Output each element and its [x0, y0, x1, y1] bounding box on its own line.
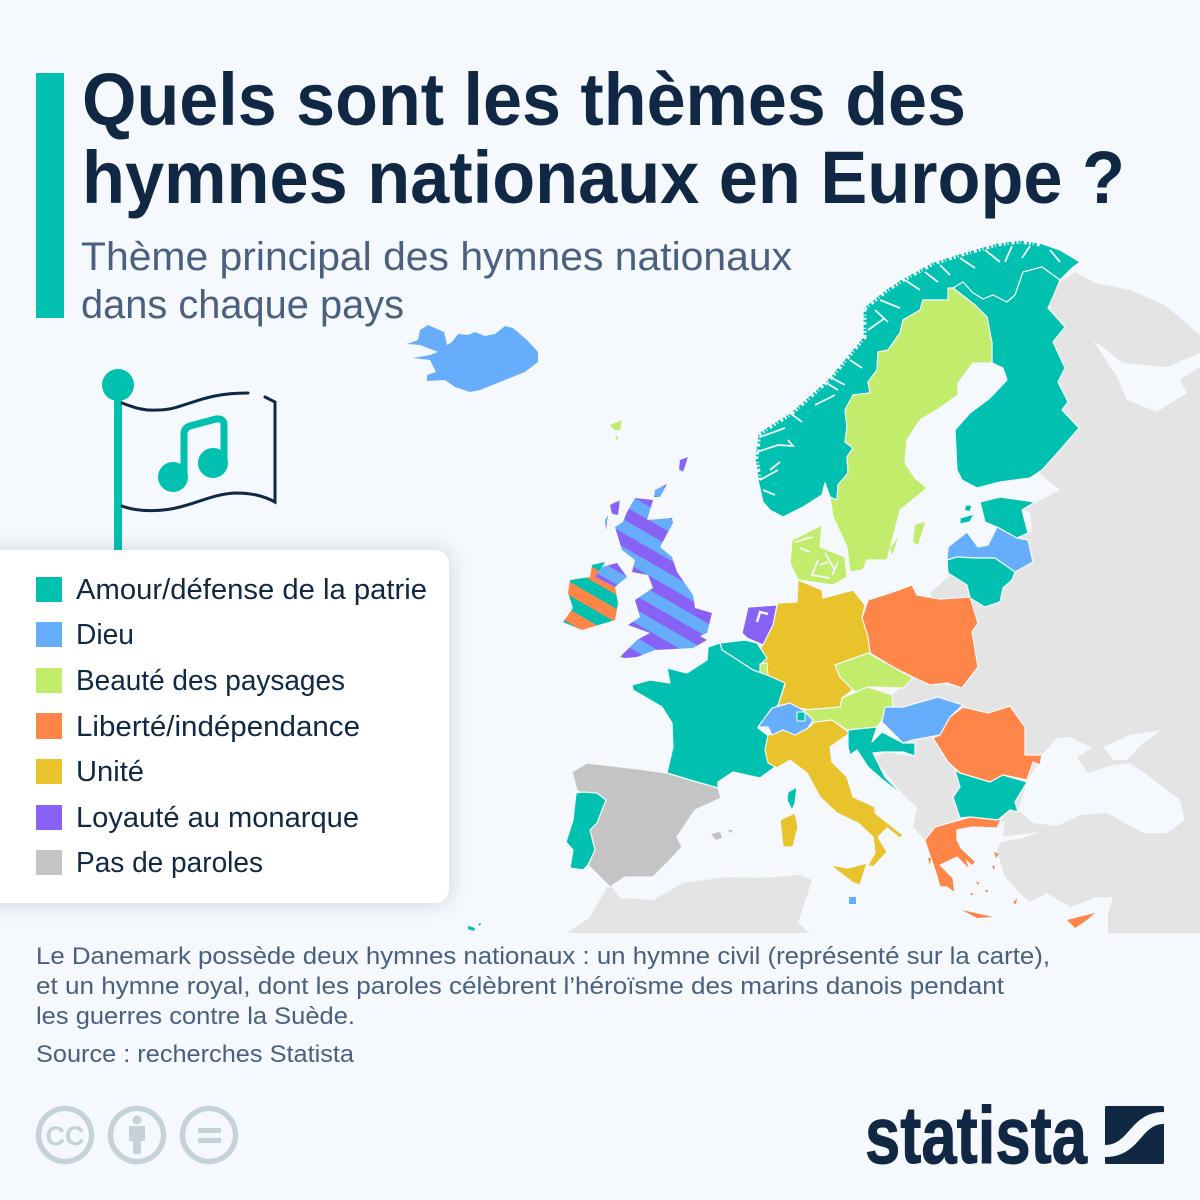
Switzerland [758, 703, 813, 735]
map of Europe [407, 240, 1200, 933]
footnote [36, 943, 1050, 1030]
Malta [849, 897, 856, 904]
Liechtenstein [797, 712, 805, 721]
legend item: Pas de paroles: Pas de paroles [76, 847, 263, 879]
Slovenia and Croatia [848, 727, 915, 797]
Corsica [787, 787, 797, 810]
Balearic islands [711, 830, 733, 840]
subtitle: Thème principal des hymnes nationaux [81, 235, 792, 279]
Austria [803, 687, 893, 730]
legend item: Dieu [36, 619, 134, 651]
Danish straits [795, 537, 838, 578]
legend item: Liberté/indépendance: Liberté/indépendance [76, 711, 360, 743]
neighbouring countries in grey [567, 272, 1200, 933]
Hungary [882, 697, 963, 743]
Norway [755, 240, 1080, 517]
panel: legend [0, 550, 449, 903]
Faroe Islands [610, 420, 622, 441]
Bulgaria [953, 770, 1027, 820]
legend item: Unité: Unité [76, 756, 144, 788]
Germany [758, 580, 870, 710]
Norway coast and fjords [755, 240, 1060, 495]
Czech Republic [835, 653, 913, 692]
footnote: les guerres contre la Suède. [36, 1003, 355, 1030]
subtitle: dans chaque pays [81, 283, 404, 327]
legend item: Dieu: Dieu [76, 619, 134, 651]
Denmark [790, 525, 847, 585]
Latvia [947, 527, 1033, 572]
Swedish island [890, 522, 925, 555]
legend item: Amour/défense de la patrie: Amour/défense de la patrie [76, 574, 427, 606]
seas cut into the grey land [1000, 474, 1185, 842]
Sicily [830, 863, 867, 885]
statista logo: statista [865, 1091, 1088, 1181]
title: Quels sont les thèmes des [82, 58, 966, 141]
title: hymnes nationaux en Europe ? [82, 136, 1125, 219]
footnote: Le Danemark possède deux hymnes nationaux : un hymne civil (représenté sur la carte), [36, 943, 1050, 970]
Lithuania [947, 557, 1015, 607]
Romania [933, 706, 1042, 782]
Netherlands [742, 605, 777, 645]
Luxembourg [760, 663, 768, 676]
title accent bar [36, 73, 64, 318]
Sardinia [780, 813, 798, 847]
Portugal [566, 792, 606, 870]
Italy [765, 720, 903, 867]
Finland [953, 267, 1079, 488]
footnote: et un hymne royal, dont les paroles célèbrent l’héroïsme des marins danois pendant [36, 973, 1004, 1000]
Ireland, striped [563, 562, 618, 630]
Sweden [830, 288, 992, 572]
United Kingdom, striped [595, 457, 712, 658]
legend item: Beauté des paysages: Beauté des paysages [76, 665, 345, 697]
icon: flag with music note [102, 369, 275, 555]
subtitle [81, 235, 792, 327]
Estonia [960, 497, 1035, 538]
Spain [572, 763, 721, 887]
legend item: Loyauté au monarque: Loyauté au monarque [76, 802, 359, 834]
title [82, 58, 1125, 219]
icon: creative commons licence badges: CC [46, 1121, 84, 1151]
Belgium [720, 640, 767, 675]
icon: creative commons licence badges [38, 1108, 236, 1162]
Poland [862, 585, 978, 688]
Greece [925, 817, 1002, 893]
source: Source : recherches Statista [36, 1041, 355, 1068]
Azores [468, 923, 481, 931]
France [632, 643, 785, 788]
Greek islands, Crete and Cyprus [928, 848, 1095, 928]
Iceland [407, 325, 538, 392]
Dutch inland sea [757, 612, 768, 622]
legend item: Unité [36, 756, 144, 788]
